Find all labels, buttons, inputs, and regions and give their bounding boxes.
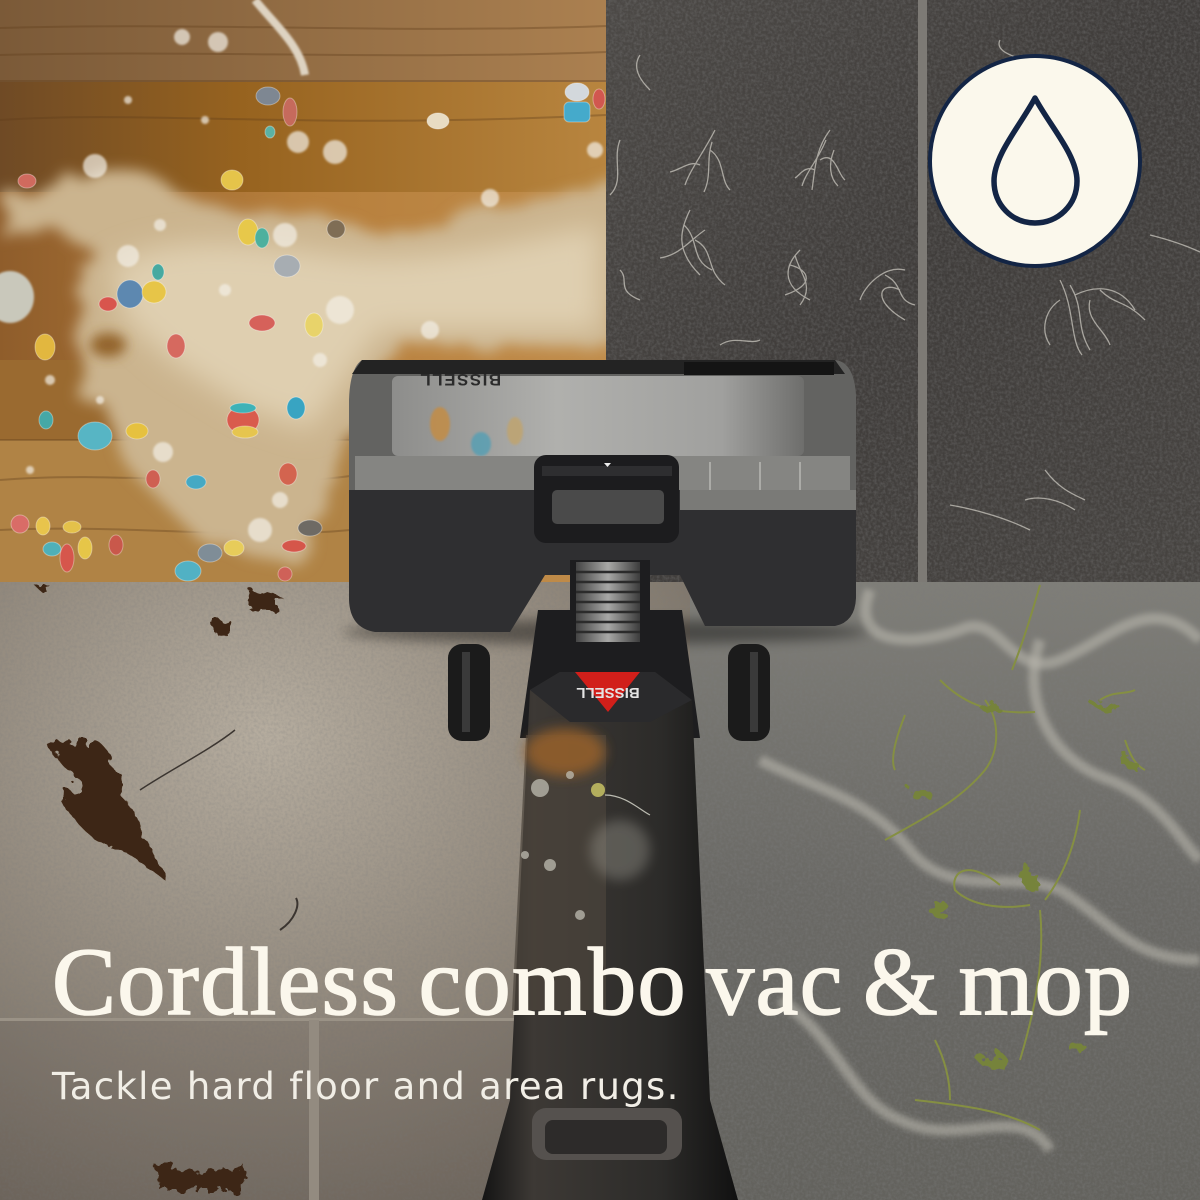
icon: water drop badge [930,56,1140,266]
icon: red BISSELL triangle badge: BISSELL [576,684,640,701]
icon: red BISSELL triangle badge [575,672,640,712]
panel: beige tile mat with mud [0,582,700,1200]
headline: Cordless combo vac & mop [52,928,1133,1035]
vacuum: cleaning head [343,360,867,644]
subheading: Tackle hard floor and area rugs. [52,1065,680,1108]
vacuum: handle and dirty water tank [482,672,738,1200]
panel: wood floor with spilled milk and cereal [0,0,620,582]
text: BISSELL logo on head: BISSELL [419,370,501,389]
panel: grey patterned rug with grass [690,582,1200,1200]
vacuum: wheels and hose [448,560,770,741]
cereal pieces [11,83,605,581]
panel: dark stone tile with pet hair [606,0,1200,582]
